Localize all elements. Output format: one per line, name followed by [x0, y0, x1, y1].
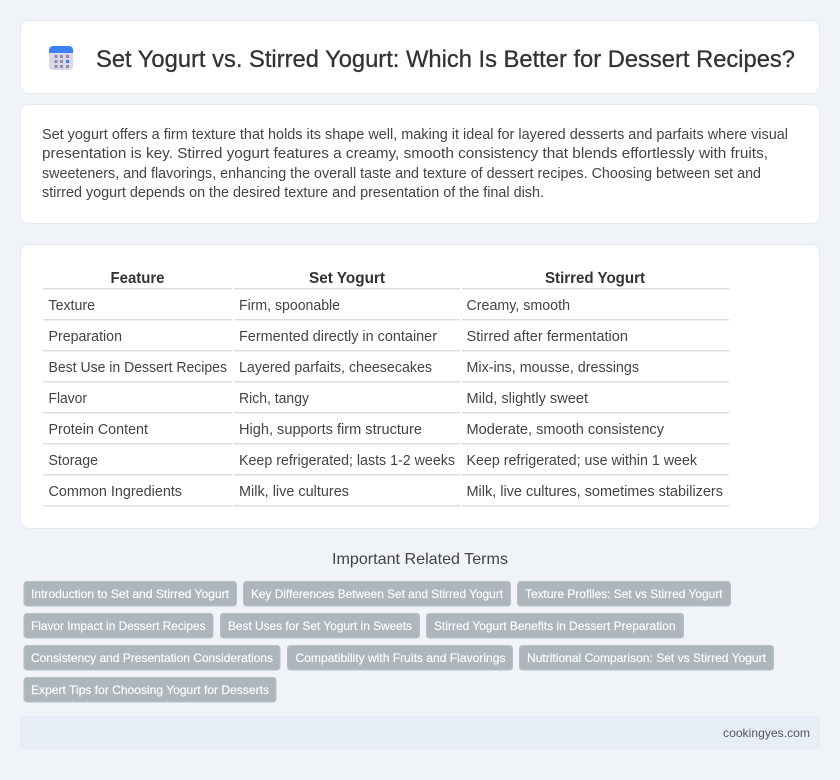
row: flavor: Flavor — [48, 391, 87, 407]
icon: calendar — [49, 46, 73, 70]
tag: flavor impact — [24, 614, 213, 638]
panel: comparison table — [20, 244, 820, 528]
row: common ingredients: Milk, live cultures — [239, 484, 349, 500]
text block: introduction paragraph — [42, 127, 788, 201]
table header: Set Yogurt — [309, 270, 386, 287]
row: texture: Texture — [48, 298, 95, 314]
text block: introduction paragraph: sweeteners, and flavorings, enhancing the overall taste and texture of dessert recipes. Choosing between set and — [42, 166, 761, 182]
title: Set Yogurt vs. Stirred Yogurt: Which Is Better for Dessert Recipes? — [96, 46, 795, 73]
row: texture: Creamy, smooth — [466, 298, 570, 314]
row: storage: Storage — [48, 453, 98, 469]
tag: texture profiles — [518, 582, 730, 606]
row: protein content: High, supports firm structure — [239, 422, 422, 438]
table header — [43, 270, 729, 290]
row: storage: Keep refrigerated; use within 1 week — [466, 453, 698, 469]
tag: best uses — [220, 614, 420, 638]
row: common ingredients — [43, 484, 729, 506]
row: common ingredients: Milk, live cultures, sometimes stabilizers — [466, 484, 723, 500]
row: common ingredients: Common Ingredients — [48, 484, 182, 500]
tag: compatibility — [288, 646, 512, 670]
row: flavor — [43, 391, 729, 414]
text block: introduction paragraph: stirred yogurt depends on the desired texture and presentation of the final dish. — [42, 185, 544, 201]
panel: header — [20, 20, 820, 94]
row: protein content — [43, 422, 729, 444]
tag: flavor impact: Flavor Impact in Dessert Recipes — [31, 619, 206, 633]
row: best use — [43, 360, 729, 382]
table header: Stirred Yogurt — [545, 270, 646, 287]
row: flavor: Mild, slightly sweet — [466, 391, 588, 407]
row: best use: Best Use in Dessert Recipes — [48, 360, 227, 376]
tag: texture profiles: Texture Profiles: Set vs Stirred Yogurt — [525, 587, 723, 601]
row: protein content: Moderate, smooth consistency — [466, 422, 665, 438]
tag: expert tips: Expert Tips for Choosing Yogurt for Desserts — [31, 683, 269, 697]
tag: key differences: Key Differences Between Set and Stirred Yogurt — [251, 587, 504, 601]
row: preparation: Fermented directly in container — [239, 329, 437, 345]
tag: nutritional comparison — [520, 646, 774, 670]
row: best use: Layered parfaits, cheesecakes — [239, 360, 432, 376]
row: preparation — [43, 329, 729, 352]
row: protein content: Protein Content — [48, 422, 148, 438]
tag: introduction — [24, 582, 236, 606]
row: texture — [43, 298, 729, 320]
row: preparation: Preparation — [48, 329, 122, 345]
heading: related terms: Important Related Terms — [332, 551, 508, 568]
tag: best uses: Best Uses for Set Yogurt in Sweets — [228, 619, 412, 633]
row: best use: Mix-ins, mousse, dressings — [466, 360, 639, 376]
tag: consistency: Consistency and Presentation Considerations — [31, 651, 273, 665]
text block: introduction paragraph: presentation is key. Stirred yogurt features a creamy, smooth consistency that blends effortlessly with fruits, — [42, 146, 768, 162]
tag: compatibility: Compatibility with Fruits and Flavorings — [296, 651, 506, 665]
footer — [20, 716, 820, 750]
tag: key differences — [244, 582, 510, 606]
table header: Feature — [110, 270, 165, 287]
row: preparation: Stirred after fermentation — [466, 329, 628, 345]
panel: introduction — [20, 104, 820, 224]
row: texture: Firm, spoonable — [239, 298, 340, 314]
tag: stirred benefits: Stirred Yogurt Benefits in Dessert Preparation — [434, 619, 676, 633]
row: flavor: Rich, tangy — [239, 391, 310, 407]
tag: consistency — [24, 646, 280, 670]
row: storage: Keep refrigerated; lasts 1-2 weeks — [239, 453, 455, 469]
tag: introduction: Introduction to Set and Stirred Yogurt — [31, 587, 230, 601]
row: storage — [43, 453, 729, 476]
footer: site name: cookingyes.com — [723, 726, 810, 740]
tag: expert tips — [24, 678, 276, 702]
text block: introduction paragraph: Set yogurt offers a firm texture that holds its shape well, making it ideal for layered desserts and parfaits where visual — [42, 127, 788, 143]
tag: nutritional comparison: Nutritional Comparison: Set vs Stirred Yogurt — [527, 651, 767, 665]
tag: stirred benefits — [426, 614, 684, 638]
tag list: related terms — [24, 582, 774, 702]
